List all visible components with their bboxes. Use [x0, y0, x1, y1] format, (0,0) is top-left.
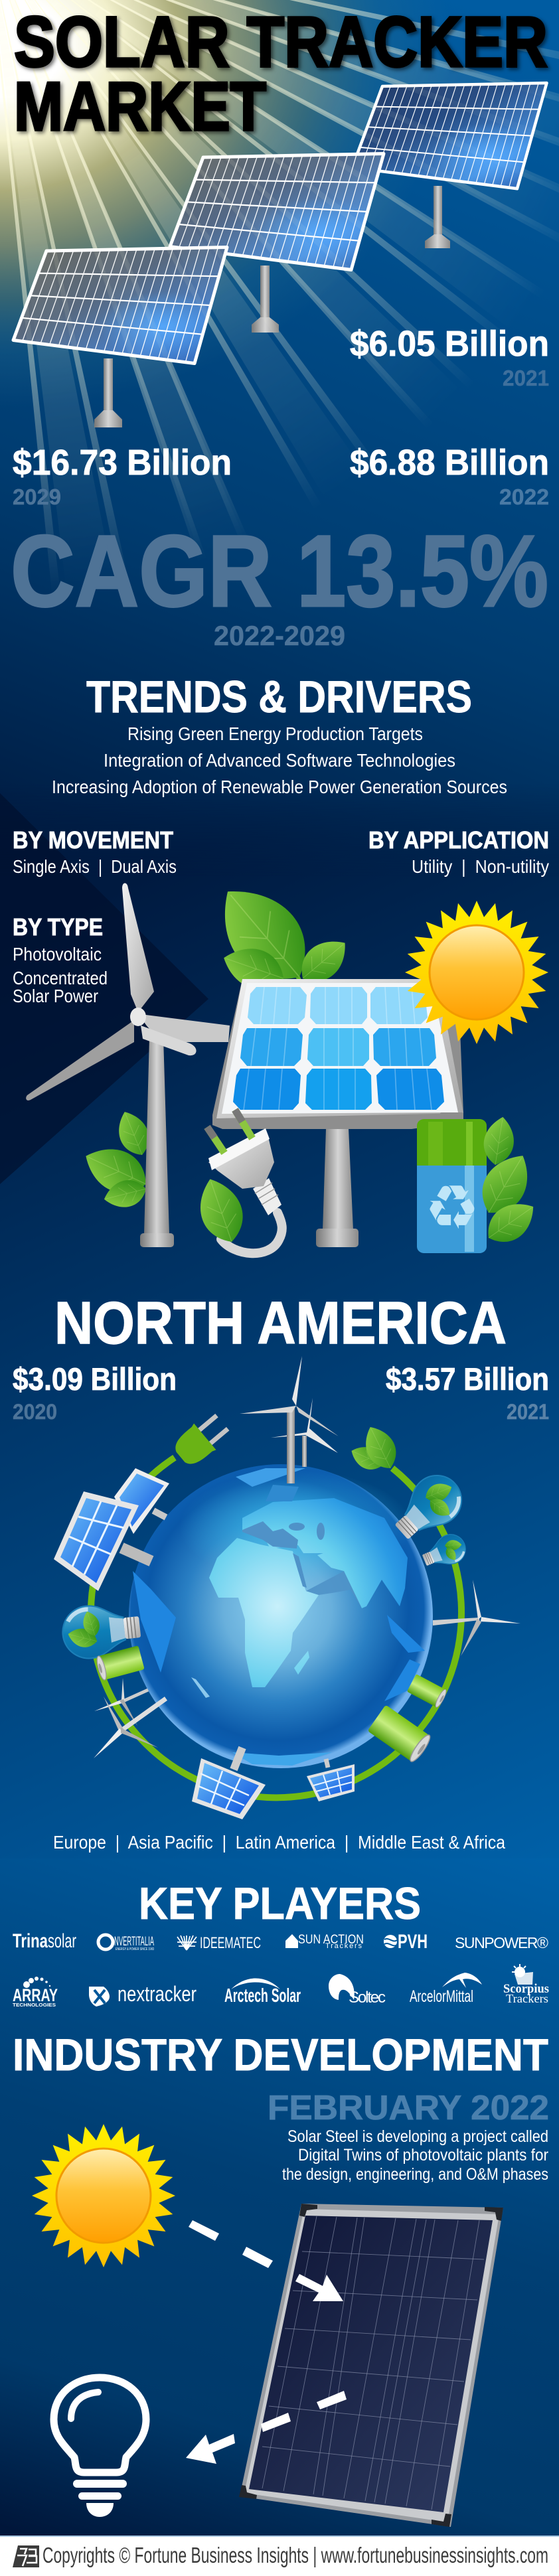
stat: 2021 market size: $6.05 Billion — [350, 324, 549, 364]
logo: SunPower: SUNPOWER® — [455, 1934, 548, 1951]
illustration: renewable energy set — [26, 870, 548, 1253]
segment: by movement — [13, 826, 177, 877]
segment: by movement: BY MOVEMENT — [13, 826, 173, 854]
logo: PVH — [384, 1931, 428, 1953]
wind turbine right — [433, 1580, 520, 1656]
recycling battery — [417, 1112, 487, 1253]
stat: 2021 regional size — [386, 1361, 549, 1424]
photovoltaic panel — [239, 2204, 503, 2527]
logo: Nextracker — [89, 1982, 197, 2007]
solar panel left — [13, 247, 227, 427]
CAGR figure: 2022-2029 — [214, 620, 345, 651]
solar panels upper left — [54, 1468, 169, 1591]
segment: by type: Solar Power — [13, 986, 98, 1006]
trends list: Increasing Adoption of Renewable Power Generation Sources — [52, 777, 507, 797]
logo: Scorpius Trackers: Scorpius — [503, 1982, 549, 1996]
leaves by battery — [471, 1114, 543, 1252]
company logos — [13, 1930, 549, 2008]
icon: light bulb — [54, 2378, 146, 2517]
segment: by type: Concentrated — [13, 968, 108, 988]
footer — [0, 2536, 559, 2576]
heading: North America: NORTH AMERICA — [54, 1290, 507, 1357]
globe — [129, 1464, 433, 1768]
stat: 2022 market size: $6.88 Billion — [350, 443, 549, 483]
stat: 2029 market size: 2029 — [13, 485, 61, 509]
logo: Convert Italia — [98, 1935, 154, 1951]
segment: by application — [368, 826, 549, 877]
logo: Sun Action Trackers: SUN ACTION — [298, 1933, 364, 1947]
other regions list: Europe | Asia Pacific | Latin America | Middle East & Africa — [53, 1832, 505, 1853]
company logos: NVERTITALIA — [114, 1935, 154, 1949]
logo: Trina Solar: solar — [48, 1930, 76, 1952]
leaves behind panel — [201, 870, 356, 999]
logo: Sun Action Trackers: Trackers — [325, 1942, 362, 1950]
logo: Ideematec — [177, 1934, 261, 1952]
heading: key players: KEY PLAYERS — [139, 1878, 421, 1929]
stat: 2029 market size: $16.73 Billion — [13, 443, 232, 483]
green plug — [169, 1409, 234, 1470]
logo: Scorpius Trackers — [503, 1964, 549, 2005]
solar panels bottom — [192, 1748, 355, 1819]
segment: by type: BY TYPE — [13, 913, 103, 941]
stat: 2021 market size — [350, 324, 549, 390]
logo: Fortune Business Insights — [13, 2545, 39, 2567]
logo: Nextracker: nextracker — [118, 1982, 197, 2006]
segment: by movement: Single Axis | Dual Axis — [13, 856, 177, 877]
logo: Arctech Solar: Arctech Solar — [224, 1985, 301, 2007]
logo: Array Technologies: ARRAY — [13, 1985, 58, 2005]
stat: 2021 regional size: 2021 — [507, 1400, 549, 1424]
stat: 2020 regional size: 2020 — [13, 1400, 57, 1424]
stat: 2022 market size: 2022 — [499, 485, 549, 509]
sunlight glow and rays — [0, 0, 559, 660]
logo: PVH: PVH — [398, 1931, 428, 1953]
logo: Arctech Solar — [224, 1978, 301, 2007]
title — [14, 1, 548, 145]
development date: FEBRUARY 2022 — [268, 2089, 549, 2127]
logo: Trina Solar: Trina — [13, 1930, 48, 1952]
trends list — [52, 723, 507, 797]
title: MARKET — [14, 68, 266, 145]
segment: by type: Photovoltaic — [13, 944, 102, 964]
development description — [282, 2127, 548, 2184]
logo: Soltec — [329, 1974, 386, 2007]
wind turbines lower left — [94, 1678, 166, 1758]
wind turbines on top — [240, 1356, 339, 1483]
logo: Soltec: Soltec — [349, 1989, 386, 2007]
illustration: three solar tracker panels — [13, 83, 547, 427]
leaves on ring — [347, 1421, 403, 1475]
arrow: sun to panel — [189, 2220, 343, 2301]
light rays over panels — [0, 0, 559, 660]
logo: ArcelorMittal: ArcelorMittal — [410, 1987, 473, 2006]
solar panel — [212, 979, 463, 1129]
logo: Array Technologies: TECHNOLOGIES — [13, 2003, 56, 2008]
solar panel right — [352, 83, 547, 248]
electric plug — [191, 1110, 282, 1253]
recycle icon: ♻ — [425, 1172, 479, 1243]
sun — [405, 901, 548, 1044]
icon: sun — [32, 2124, 175, 2267]
stat: 2021 market size: 2021 — [503, 366, 549, 390]
stat: 2020 regional size — [13, 1361, 177, 1424]
batteries — [95, 1645, 448, 1764]
illustration: globe with renewable energy ring — [54, 1356, 520, 1819]
stat: 2020 regional size: $3.09 Billion — [13, 1361, 177, 1397]
stat: 2029 market size — [13, 443, 232, 509]
leaves behind turbine — [77, 1106, 155, 1212]
logo: Sun Action Trackers — [285, 1933, 364, 1950]
green ring — [91, 1458, 461, 1797]
light bulbs — [60, 1466, 471, 1661]
logo: ArcelorMittal — [410, 1973, 482, 2006]
logo: Scorpius Trackers: Trackers — [506, 1992, 548, 2005]
logo: Convert Italia: ENERGY & POWER SINCE 1983 — [116, 1947, 154, 1951]
heading: trends and drivers: TRENDS & DRIVERS — [86, 672, 472, 722]
stat: 2022 market size — [350, 443, 549, 509]
logo: Array Technologies — [13, 1977, 58, 2008]
segment: by type — [13, 913, 108, 1006]
trends list: Rising Green Energy Production Targets — [127, 723, 423, 744]
logo: Ideematec: IDEEMATEC — [200, 1934, 261, 1952]
wind turbine — [26, 883, 230, 1247]
panel pole — [316, 1128, 359, 1247]
arrow: panel to bulb — [186, 2391, 347, 2464]
solar panel middle — [170, 154, 384, 333]
trends list: Integration of Advanced Software Technologies — [104, 750, 455, 771]
